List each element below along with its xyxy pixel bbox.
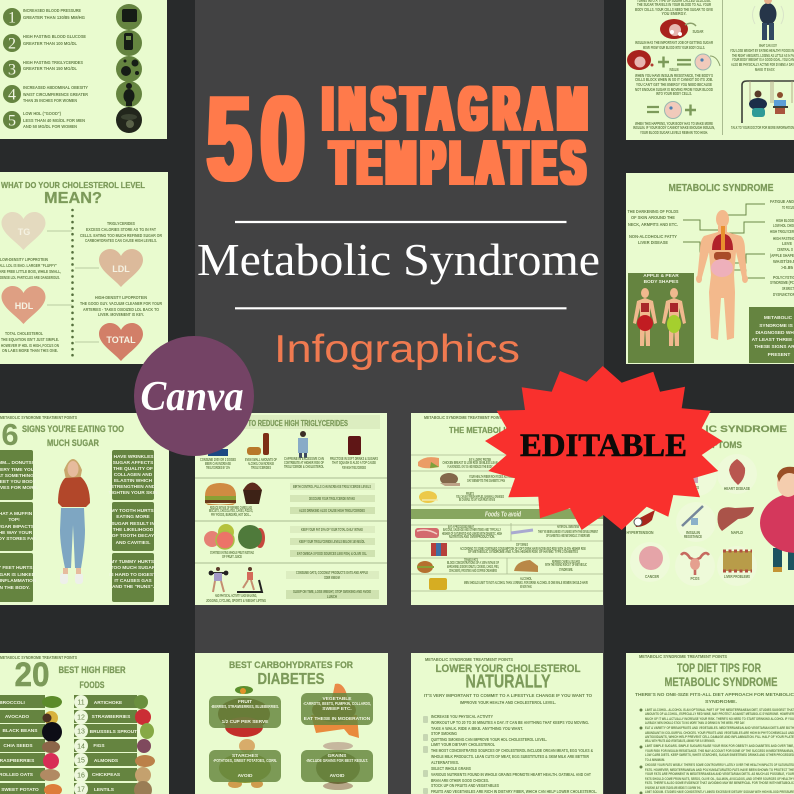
panel: metabolic syndrome criteria: GREATER THAN 100 MG/DL [23,41,77,46]
tips row one: BIRTH CONTROL PILLS CAN INCREASE TRIGLYCERIDE LEVELS [293,484,371,489]
panel: how to reduce high triglycerides: TRIGLYCERIDE & CHOLESTEROL [284,464,324,469]
panel: cholesterol level meaning: ALL LDL IS BAD. LARGER "FLUFFY" [0,263,57,268]
panel: cholesterol level meaning: CELLS. EATING TOO MUCH REFINED SUGAR OR [80,233,163,238]
right food list: 11 [77,700,85,706]
tips text: SYNDROME, BUT MORE STUDIES ARE NEEDED TO CONFIRM THIS. [645,785,701,790]
panel: best carbohydrates for diabetes [195,653,388,794]
tips row one: DISCOURE YOUR TRIGLYCERIDE INTAKE [309,496,355,501]
right food icons [134,695,155,794]
heading: metabolic syndrome symptoms: SYMPTOMS [694,440,742,451]
badge: canva [134,336,254,456]
intro text [424,693,592,705]
heading: best carbohydrates for diabetes: DIABETES [258,671,325,688]
foods to avoid rows: SYNDROME. [559,567,573,572]
icon: swing set with children [742,81,794,123]
panel: cholesterol level meaning: LOW-DENSITY LIPOPROTEIN [0,257,48,262]
right sign boxes: COLLAGEN AND [114,472,153,478]
panel: metabolic syndrome criteria: AND 50 MG/DL FOR WOMEN [23,124,78,129]
symptom icon circles: HYPERTENSION [626,530,654,535]
foods to avoid rows: OF METABOLIC SYNDROME AND A 25% HIGHER RISK OF HAVING TYPE 2 DIABETES [468,549,578,554]
badge: editable starburst [485,366,722,530]
heading: 6 signs [1,417,124,452]
panel: cholesterol level meaning: CARBOHYDRATES CAN CAUSE HIGH LEVELS. [85,238,157,243]
foods to avoid rows: OF DIABETES AND METABOLIC SYNDROME [546,533,590,538]
heading: what do your cholesterol level mean: MEAN? [44,190,102,207]
checklist text: SELECT WHOLE GRAINS [431,766,471,771]
symptom icon circles: HEART DISEASE [724,486,750,491]
panel: how to reduce high triglycerides: REDUCE INTAKE OF REFINED CARBS LIKE [210,505,252,510]
panel: metabolic syndrome criteria: 2 [8,36,16,52]
apple and pear body shapes box: BODY SHAPES [644,279,679,285]
callout: diagnosed when three signs present [749,307,794,363]
checklist text: ALTERNATIVES. [431,760,459,765]
foods to avoid rows: CRACKERS, FROSTING AND COFFEE CREAMERS [449,568,497,573]
right food list: BRUSSELS SPROUTS [90,729,141,735]
panel: how to reduce high triglycerides: TRIGLYCERIDES BY 10% [206,465,230,470]
foods to eat: CHICKEN BREAST IS LOW RISK SKINLESS LEAN [442,460,498,465]
panel: metabolic syndrome body diagram: >0.85 [781,265,793,270]
panel: cholesterol level meaning: ON LABS MORE THAN THIS ONE. [2,348,58,353]
left food list bars: CHIA SEEDS [3,743,33,749]
panel: metabolic syndrome criteria [0,0,167,139]
panel: metabolic syndrome criteria: 3 [8,62,16,78]
panel: how to reduce high triglycerides: THAT SQUASH IS ALSO A TOP CAUSE [332,460,376,465]
panel: insulin resistance: WHEN THIS HAPPENS, YOUR BODY HAS TO MAKE MORE [635,121,713,126]
left food list bars: RASPBERRIES [0,758,35,764]
foods to avoid rows: SOFT DRINKS [516,542,528,547]
panel: metabolic syndrome body diagram: LEVE [782,241,792,246]
panel: metabolic syndrome body diagram: OF SKIN AROUND THE [631,215,675,220]
tips row one: ALSO DRINKING ALSO CAUSE HIGH TRIGLYCERIDES [299,508,365,513]
panel: cholesterol level meaning: TOTAL CHOLESTEROL [5,331,43,336]
right sign boxes: TIGHTEN YOUR SKIN [109,490,158,496]
main title: 50 instagram templates: INSTAGRAM [323,74,587,144]
food images behind boxes [218,684,360,790]
foods to eat: EAT A LOWFAT PROTEIN [469,457,491,462]
icon: exercising people [209,567,262,592]
woman in red sweater [58,459,90,584]
text: THEY'VE BEEN LINKED AT LINKED WITH THE DEVELOPMENT [538,529,598,534]
tips text: MEAL WITH FRUITS AND VEGETABLES, AIMING FOR 5-9 SERVINGS. [645,738,715,743]
right food list: ARTICHOKE [94,700,123,706]
panel: metabolic syndrome criteria: 5 [8,112,16,130]
tips row two: KEEP YOUR FAT 30% OF YOUR TOTAL DAILY INTAKE [301,527,363,532]
panel: metabolic syndrome criteria: HIGH FASTING BLOOD GLUCOSE [23,34,86,39]
panel: insulin resistance: YOU CAN'T GET THE ENERGY YOU NEED BECAUSE [636,82,712,87]
panel: how to reduce high triglycerides: STARTED EATING WHOLE FRUIT INSTEAD [210,550,254,555]
checklist text: QUITTING SMOKING CAN IMPROVE YOUR HDL CHOLESTEROL LEVEL. [431,737,547,742]
panel: how to reduce high triglycerides: EVEN SMALL AMOUNTS OF [245,457,277,462]
panel: cholesterol level meaning: EXCESS CALORIES STORE AS TG IN FAT [86,227,156,232]
symptom icon circles: NAFLD [731,530,744,535]
hearts: LDL [112,264,130,274]
tips row three: LUNCH [327,594,337,599]
checklist icons [423,716,428,794]
category boxes: FRUIT [238,699,252,705]
panel: metabolic syndrome criteria: GREATER THAN 150 MG/DL [23,66,77,71]
heading: 6 signs: SIGNS YOU'RE EATING TOO [22,424,124,434]
category boxes: AVOID [330,773,345,779]
foods to avoid rows: BACONS, SAUSAGE AND OTHER ITEMS AND TYPICALLY [443,527,501,532]
left sign boxes [0,450,38,602]
right food list: FIGS [93,743,105,749]
intro text [635,692,794,704]
dotted timeline [71,210,74,360]
panel: metabolic syndrome body diagram: NECK, ARMPITS AND ETC. [628,222,678,227]
intro text: IT'S VERY IMPORTANT TO COMMIT TO A LIFESTYLE CHANGE IF YOU WANT TO [424,693,592,698]
foods to eat: OAT BENEFITS THE DIABETIC PAN [467,478,505,483]
category boxes: 1/2 CUP PER SERVE [222,719,269,725]
panel: cholesterol level meaning: HIGH-DENSITY LIPOPROTEIN [95,295,148,300]
right sign boxes: THE QUALITY OF [113,466,153,472]
panel: metabolic diet foods to eat and avoid [411,413,603,605]
checklist text: TAKE A WALK. RIDE A BIKE. ANYTHING YOU WANT. [431,726,523,731]
panel: insulin resistance: YOU ENERGY. [662,11,686,16]
panel: metabolic syndrome criteria: INCREASED ABDOMINAL OBESITY [23,85,88,90]
badge: canva: Canva [140,374,244,420]
tips text: TO A MINIMUM. [645,757,665,762]
symptom icon circles: RESISTANCE [684,534,702,539]
heading: best carbohydrates for diabetes: BEST CARBOHYDRATES FOR [229,660,353,670]
tips row two: KEEP YOUR TRIGLYCERIDE LEVELS BELOW 150 MG/DL [299,539,365,544]
panel: 6 signs you're eating too much sugar [0,413,169,605]
foods to avoid banner [411,509,603,519]
heading: what do your cholesterol level mean [1,180,145,207]
panel: metabolic syndrome body diagram: NON-ALCOHOLIC FATTY [629,234,677,239]
category boxes: SWEEP ETC. [322,706,352,712]
panel: metabolic syndrome criteria: LOW HDL ("GOOD") [23,111,61,116]
icon: blood cell with sugar [660,19,696,39]
panel: cholesterol level meaning: HOWEVER IF HDL IS HIGH, FOCUS ON [1,343,59,348]
callout: diagnosed when three signs present: PRESENT [768,352,790,358]
symptom icon circles: LIVER PROBLEMS [724,574,750,579]
right sign boxes: ELASTIN WHICH [114,478,153,484]
panel: cholesterol level meaning: TRIGLYCERIDES [107,221,135,226]
hearts: HDL [15,301,34,311]
right sign boxes: OF TOOTH DECAY [112,533,155,539]
row dividers [195,478,387,563]
foods to avoid rows: REFINED CARBS & SUGARS [552,559,580,564]
panel: lower your cholesterol naturally: METABOLIC SYNDROME TREATMENT POINTS [425,657,513,662]
foods to eat: FLAVONOIDS. OAT IS AND REDUCE THE BODY [448,464,492,469]
panel: how to reduce high triglycerides: BEER CAN INCREASE [205,461,231,466]
icon: burger and cupcake [205,482,262,505]
panel: insulin resistance: SUGAR [692,29,704,34]
panel: how to reduce high triglycerides: FRUCTOSE IN SOFT DRINKS & SUGARS [330,456,378,461]
panel: metabolic syndrome symptoms [626,413,794,605]
subtitle: metabolic syndrome: Metabolic Syndrome [197,234,600,285]
tips row three: CIDER VINEGAR [324,575,340,580]
right food list: 15 [77,758,85,764]
tips row three [286,570,379,599]
panel: insulin resistance: CELLS BLOCK WHEN IN SO IT CANNOT DO ITS JOB. [635,77,713,82]
heading: 20 best high fiber foods [14,656,126,694]
right sign boxes: SUGAR AFFECTS [113,460,154,466]
foods to avoid rows: HIGHER OF SATURATED AND LINKED WITH DIABETIC, HIGH [442,531,502,536]
right food list: LENTILS [94,787,115,793]
panel: metabolic syndrome body diagram: THE DARKENING OF FOLDS [628,209,678,214]
panel: cholesterol level meaning: ARE FREE LITTLE BOIS, WHILE SMALL, [0,269,61,274]
panel: metabolic syndrome criteria: 4 [8,86,16,104]
tips row three: CONSUME OATS, COCONUT PRODUCTS OATS AND APPLE [296,570,368,575]
category boxes: -POTATOES, SWEET POTATOES, CORN. [213,758,277,764]
right food list: 12 [77,714,85,722]
icon: overweight man [752,0,784,40]
panel: metabolic syndrome criteria: INCREASED BLOOD PRESSURE [23,8,81,13]
panel: 6 signs you're eating too much sugar: METABOLIC SYNDROME TREATMENT POINTS [0,415,77,420]
tips row two: EAT OMEGA-3 FOOD SOURCES LIKE FISH, & OLIVE OIL. [297,551,367,556]
heading: 6 signs: MUCH SUGAR [47,438,99,448]
foods to avoid rows: WITH THE RISING RISKS IT OF METABOLIC [545,562,587,567]
body figure with organs [696,210,748,340]
symptom icon circles: INSULIN [686,530,701,535]
intro text: IMPROVE YOUR HEALTH AND CHOLESTEROL LEVEL. [460,700,556,705]
category boxes: VEGETABLE [323,696,352,702]
heading: metabolic syndrome symptoms [649,424,787,451]
panel: cholesterol level meaning: ARTERIES - TAKES OXIDIZED LDL BACK TO [83,307,159,312]
panel: metabolic diet foods to eat and avoid: YOUR HEALTH FIBER RICH FOODS ALTHOUGH [469,474,515,479]
heading band [232,415,380,429]
panel: metabolic diet foods to eat and avoid: YOU CAN EAT FRESH APPLES, BANANAS, ORANGES [456,494,504,499]
panel: 20 best high fiber foods: METABOLIC SYNDROME TREATMENT POINTS [0,655,77,660]
panel: insulin resistance: BODY CELLS. YOUR CELLS NEED THE SUGAR TO GIVE [635,7,713,12]
panel: how to reduce high triglycerides: FOR HIGH TRIGLYCERIDES [342,465,366,470]
panel: insulin resistance [626,0,794,140]
panel: cholesterol level meaning: LIVER. MOVEMENT IS KEY. [98,312,144,317]
tips row two [290,526,375,557]
left sign boxes: TOP! [8,517,20,523]
right sign boxes: AND CAVITIES. [116,540,150,546]
foods to avoid rows: NUTRITION AND OVERPRODUCTION. [449,534,495,539]
panel: how to reduce high triglycerides [195,413,387,605]
panel: metabolic syndrome criteria: 1 [8,10,16,26]
icon: guava and watermelon [204,524,265,549]
checklist text: FRUITS AND VEGETABLES ARE RICH IN DIETARY FIBER, WHICH CAN HELP LOWER CHOLESTEROL. [431,789,597,794]
checklist text: INCREASE YOU PHYSICAL ACTIVITY [431,714,493,719]
panel: 20 best high fiber foods [0,653,169,794]
hearts [2,212,143,361]
main title: 50 instagram templates: TEMPLATES [330,128,585,197]
hearts: TOTAL [106,335,136,345]
tips text [645,707,794,794]
panel: insulin resistance: THE SUGAR TRAVELS IN YOUR BLOOD TO ALL YOUR [637,2,711,7]
panel: lower your cholesterol naturally [411,653,603,794]
apple and pear body shapes box: APPLE & PEAR [643,273,679,279]
tips row one [290,483,375,514]
panel: how to reduce high triglycerides: AND PHYSICAL ACTIVITY LIKE WALKING, [215,593,257,598]
right sign boxes: TOO MUCH SUGAR [111,565,156,571]
heading: best carbohydrates for diabetes [229,660,353,688]
overweight boy figure [760,467,794,572]
foods to avoid rows: MARGARINE, DONOR DONUTS, COOKIES, CAKES, PIES, [447,564,499,569]
panel: how to reduce high triglycerides: OF FRUIT JUICE [222,554,242,559]
callout: diagnosed when three signs present: SYNDROME IS [759,323,794,329]
foods to avoid rows: NO MORE THAN 1 [520,584,532,589]
panel: how to reduce high triglycerides: ALCOHOL CAN INCREASE [248,461,274,466]
category boxes: -CARROTS, BEETS, PUMPKIN, COLLARDS, [303,701,371,707]
heading: 20 best high fiber foods: FOODS [80,680,104,690]
panel: insulin resistance: MAKE IT EASY. [755,67,775,72]
right food list: 13 [77,728,85,736]
center column background [195,0,604,794]
connector lines [683,204,765,278]
tips row three: SLEEP ON TIME, LOSE WEIGHT, STOP SMOKING AND AVOID [293,589,371,594]
panel: cholesterol level meaning: DENSE LDL PARTICLES ARE DANGEROUS. [0,275,60,280]
bullet dots [640,708,642,794]
panel: how to reduce high triglycerides: JOGGING, CYCLING, SPORTS & WEIGHT LIFTING [206,598,266,603]
panel: metabolic syndrome criteria: THAN 35 INCHES FOR WOMEN [23,98,78,103]
left food list bars: AVOCADO [5,714,29,720]
heading: metabolic syndrome: METABOLIC SYNDROME [668,183,774,194]
panel: metabolic syndrome criteria: WAIST CIRCUMFERENCE GREATER [23,92,89,97]
checklist text: THE MOST CONCENTRATED SOURCES OF CHOLESTEROL INCLUDE ORGAN MEATS, EGG YOLKS & [431,748,593,753]
right sign boxes [109,450,158,602]
right food list: 16 [77,772,85,780]
right sign boxes: MY TOOTH HURTS! [111,508,156,514]
checklist text: WHOLE MILK PRODUCTS. LEAN CUTS OF MEAT, EGG SUBSTITUTES & SKIM MILK ARE BETTER [431,754,590,759]
left food list bars: BLACK BEANS [3,728,38,734]
checklist text: WORKOUT UP TO 20 TO 30 MINUTES A DAY. IT CAN BE ANYTHING THAT KEEPS YOU MOVING. [431,720,589,725]
checklist text: VARIOUS NUTRIENTS FOUND IN WHOLE GRAINS PROMOTE HEART HEALTH. OATMEAL AND OAT [431,772,591,777]
foods to eat [418,457,515,503]
checklist text: STOP SMOKING [431,731,457,736]
panel: metabolic syndrome criteria: GREATER THAN 130/85 MM/HG [23,15,85,20]
right food list [74,695,141,794]
panel: insulin resistance: INSULIN [670,67,679,72]
category boxes: STARCHES [232,753,259,759]
right sign boxes: STRENGTHEN AND [111,484,156,490]
left food list bars [0,695,45,794]
left food list bars: ROLLED OATS [0,772,34,778]
foods to avoid rows: ACCORDING TO SOME CONTINUED CONSUMPTION OF SOFT DRINK HAVE INCREASED RISK WITH 15-30% HIGHER RISK [460,546,586,551]
panel: how to reduce high triglycerides: CONSUME 2000 OR 3 DOSES [200,457,236,462]
panel: how to reduce high triglycerides: FRY FOODS, BURGERS, HOT DOG... [211,512,251,517]
right sign boxes: IT CAUSES GAS [114,578,152,584]
right sign boxes: THE LIKELIHOOD [113,527,154,533]
foods to avoid rows [415,524,598,590]
left food icons [40,696,62,794]
category boxes [209,693,373,782]
icon: blood cell plus insulin equals cell [627,50,720,70]
right sign boxes: MY TUMMY HURTS! [110,559,156,565]
intro text: THERE'S NO ONE-SIZE FITS-ALL DIET APPROACH FOR METABOLIC [635,692,794,697]
callout: diagnosed when three signs present: METABOLIC [764,315,793,321]
checklist text: STOCK UP ON FRUITS AND VEGETABLES [431,783,499,788]
right sign boxes: AND THE "RUNS". [112,584,154,590]
heading: 20 best high fiber foods: BEST HIGH FIBER [58,665,126,675]
panel: how to reduce high triglycerides: TRIGLYCERIDES [251,465,271,470]
heading: top diet tips: TOP DIET TIPS FOR [677,661,761,675]
heading: lower your cholesterol naturally [436,663,581,692]
heading: 6 signs: 6 [1,417,19,452]
foods to avoid banner: Foods To avoid [485,512,522,518]
panel: insulin resistance: INSULIN HAS THE IMPORTANT JOB OF GETTING SUGAR [635,40,713,45]
checklist text: BRAN ARE OTHER GOOD CHOICES. [431,778,489,783]
panel: top diet tips for metabolic syndrome: METABOLIC SYNDROME TREATMENT POINTS [639,654,727,659]
right sign boxes: I HAVE WRINKLES! [111,454,155,460]
left food list bars: SWEET POTATO [1,787,39,793]
panel: metabolic diet foods to eat and avoid: METABOLIC SYNDROME TREATMENT POINTS [424,415,504,420]
heading: metabolic syndrome symptoms: METABOLIC SYNDROME [649,424,787,435]
right sign boxes: EATING MORE [116,514,151,520]
main title: 50 instagram templates [208,72,587,206]
heading: lower your cholesterol naturally: NATURALLY [466,672,550,692]
foods to avoid rows: ARTIFICIAL SWEETENE [557,524,579,529]
symptom icon circles [626,454,757,586]
heading: what do your cholesterol level mean: WHAT DO YOUR CHOLESTEROL LEVEL [1,180,145,190]
right sign boxes: IS HARD TO DIGEST. [109,572,157,578]
heading: 20 best high fiber foods: 20 [14,656,50,694]
right food list: 17 [77,786,85,794]
panel: cholesterol level meaning: THE GOOD GUY. VACUUM CLEANER FOR YOUR [80,301,163,306]
badge: editable starburst: EDITABLE [520,428,687,464]
heading: top diet tips [664,661,778,689]
foods to eat: FRUITS [466,491,474,496]
panel: cholesterol level meaning: THE EQUATION ISN'T JUST SIMPLE. [1,337,59,342]
foods to eat: BE CAREFUL TO EAT YOUR FRUIT INTAKE [459,497,495,502]
panel: insulin resistance: MOVE FROM YOUR BLOOD INTO YOUR BODY CELLS. [643,45,705,50]
panel: insulin resistance: INSULIN. IF YOUR BODY CANNOT MAKE ENOUGH INSULIN, [633,125,715,130]
subtitle: infographics: Infographics [274,328,520,371]
apple and pear body shapes box [628,273,694,363]
top row icons [208,431,361,458]
heading: lower your cholesterol naturally: LOWER YOUR CHOLESTEROL [436,663,581,675]
right food list: 14 [77,744,85,750]
panel: how to reduce high triglycerides: CAFFEINE IN EXCESSIVE CAN [284,456,324,461]
category boxes: GRAINS [328,753,347,759]
checklist text [431,714,597,794]
category boxes: -INCLUDE GRAINS FOR BEST RESULT. [306,758,368,764]
panel: how to reduce high triglycerides: BISCUITS, CHOCOLATES, CAKES, PIZZAS, [209,508,253,513]
panel: metabolic syndrome body diagram: LIVER DISEASE [638,240,668,245]
panel: top diet tips for metabolic syndrome [626,653,794,794]
panel: metabolic syndrome criteria: HIGH FASTING TRIGLYCERIDES [23,60,83,65]
panel: metabolic syndrome criteria: LESS THAN 40 MG/DL FOR MEN [23,118,86,123]
right food list: ALMONDS [94,758,119,764]
right sign boxes: SUGAR RESULT IN [111,521,155,527]
foods to avoid rows: ALCOHOL [520,576,532,581]
intro text: SYNDROME. [705,699,737,704]
checklist text: LIMIT YOUR DIETARY CHOLESTEROL [431,742,495,747]
panel: insulin resistance: WHEN YOU HAVE INSULIN RESISTANCE, THE BODY'S [635,73,713,78]
symptom icon circles: ETS [693,485,699,490]
heading: the metabolic diet: THE METABOLIC [449,425,511,435]
foods to avoid rows: EAT A PROCESSED MEAT [448,524,474,529]
panel: insulin resistance: YOUR BLOOD SUGAR LEVELS REMAIN TOO HIGH. [640,130,708,135]
category boxes: AVOID [238,773,253,779]
divider lines [235,222,566,308]
right food list: CHICKPEAS [92,772,121,778]
symptom icon circles: CANCER [645,574,659,579]
panel: how to reduce high triglycerides: CONTRIBUTE AT HIGHER RISK OF [284,460,324,465]
main title: 50 instagram templates: 50 [208,72,304,206]
foods to avoid rows: BLOOD CONCENTRATIONS OF A 100% INTAKE OF [447,560,499,565]
symptom icon circles: PCOS [690,576,700,581]
right food list: STRAWBERRIES [92,714,131,720]
icon: cell equation [647,102,696,118]
category boxes: -BERRIES, STRAWBERRIES, BLUEBERRIES. [211,704,279,710]
panel: insulin resistance: NOT ENOUGH SUGAR IS MOVING FROM YOUR BLOOD [635,87,713,92]
panel: insulin resistance: INTO YOUR BODY CELLS. [656,91,692,96]
panel: metabolic syndrome body diagram [626,173,794,364]
hearts: TG [18,227,30,237]
panel: cholesterol level meaning [0,172,168,364]
foods to avoid rows: MEN SHOULD LIMIT TO NOT ALCOHOL THAN 1 DRINKS. FOR DRINK ALCOHOL IS ONE MALE WOMEN SHOULD HAVE [464,580,588,585]
category boxes: EAT THESE IN MODERATION [304,716,371,722]
heading band: HOW TO REDUCE HIGH TRIGLYCERIDES [232,419,348,428]
foods to avoid rows: TRANS FATS [464,557,478,562]
